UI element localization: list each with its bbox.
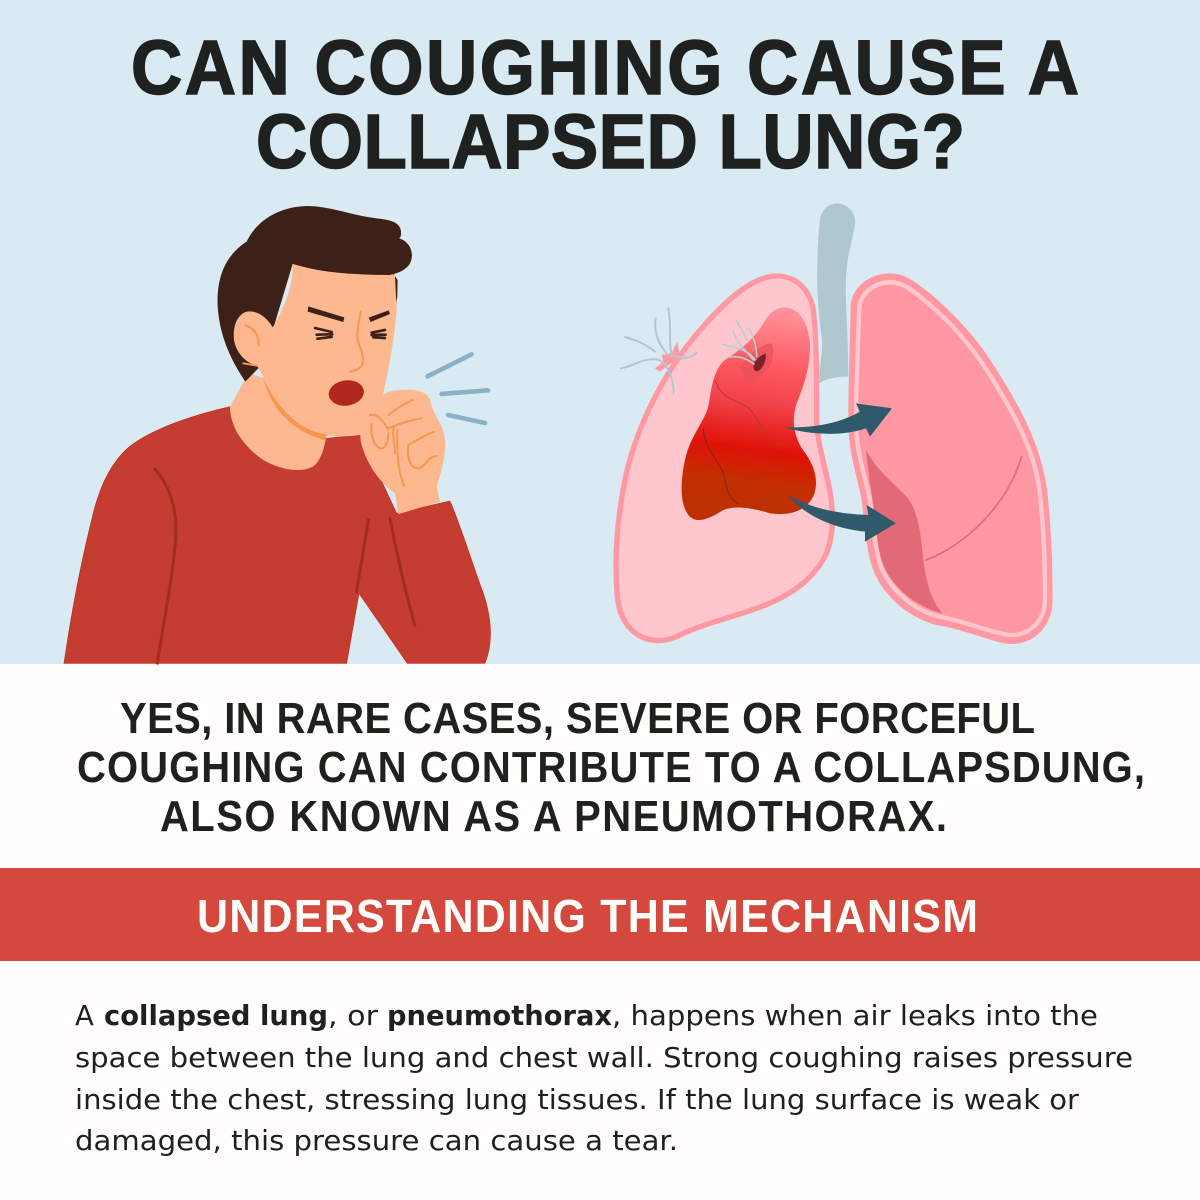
- collapsed lung region: [682, 307, 816, 520]
- body paragraph: pneumothorax: [387, 1000, 612, 1032]
- nose: [351, 312, 363, 372]
- face: [257, 264, 397, 436]
- answer and body background: [0, 664, 1200, 1200]
- lung fissure: [926, 457, 1022, 560]
- eyebrows: [308, 306, 390, 322]
- hero background: [0, 0, 1200, 664]
- hair: [218, 206, 412, 382]
- pleural tear patch: [655, 342, 680, 372]
- trachea: [817, 203, 855, 383]
- tear: [740, 343, 773, 380]
- illustration: lungs: [616, 203, 1053, 644]
- collapsed left lung outline: [616, 276, 832, 641]
- healthy right lung pale rim: [856, 282, 1045, 635]
- body paragraph: [75, 1000, 1133, 1157]
- fist: [360, 390, 445, 514]
- cough lines: [428, 354, 488, 423]
- answer statement: ALSO KNOWN AS A PNEUMOTHORAX.: [160, 792, 947, 840]
- answer statement: YES, IN RARE CASES, SEVERE OR FORCEFUL: [120, 694, 1035, 742]
- body paragraph: damaged, this pressure can cause a tear.: [75, 1125, 678, 1157]
- mouth: [327, 378, 366, 408]
- body paragraph: space between the lung and chest wall. Strong coughing raises pressure: [75, 1042, 1133, 1074]
- ear: [234, 311, 273, 366]
- sweater: [64, 407, 490, 663]
- lung vessels: [715, 380, 783, 445]
- answer statement: [77, 694, 1145, 840]
- illustration: coughing man: [64, 206, 490, 663]
- answer statement: COUGHING CAN CONTRIBUTE TO A COLLAPSDUNG,: [77, 743, 1145, 791]
- section banner: UNDERSTANDING THE MECHANISM: [197, 890, 978, 942]
- right lung shadow: [866, 450, 942, 613]
- ear detail: [243, 325, 259, 366]
- body paragraph: inside the chest, stressing lung tissues. If the lung surface is weak or: [75, 1084, 1080, 1116]
- title: CAN COUGHING CAUSE A: [131, 24, 1079, 111]
- body paragraph: , or: [328, 1000, 379, 1032]
- title: [131, 24, 1079, 185]
- arrow: lower: [787, 495, 896, 542]
- neck: [230, 373, 327, 470]
- jaw shadow: [263, 378, 327, 441]
- body paragraph: , happens when air leaks into the: [612, 1000, 1098, 1032]
- sweater folds: [155, 469, 415, 663]
- pleura fibres: [621, 308, 697, 393]
- title: COLLAPSED LUNG?: [256, 98, 965, 185]
- body paragraph: collapsed lung: [104, 1000, 328, 1032]
- eyes: [315, 328, 386, 339]
- section banner: [0, 868, 1200, 961]
- tear fibres: [722, 320, 757, 364]
- fist detail: [370, 400, 437, 486]
- arrow: upper: [783, 403, 892, 437]
- healthy right lung outer: [848, 273, 1053, 644]
- body paragraph: A: [75, 1000, 94, 1032]
